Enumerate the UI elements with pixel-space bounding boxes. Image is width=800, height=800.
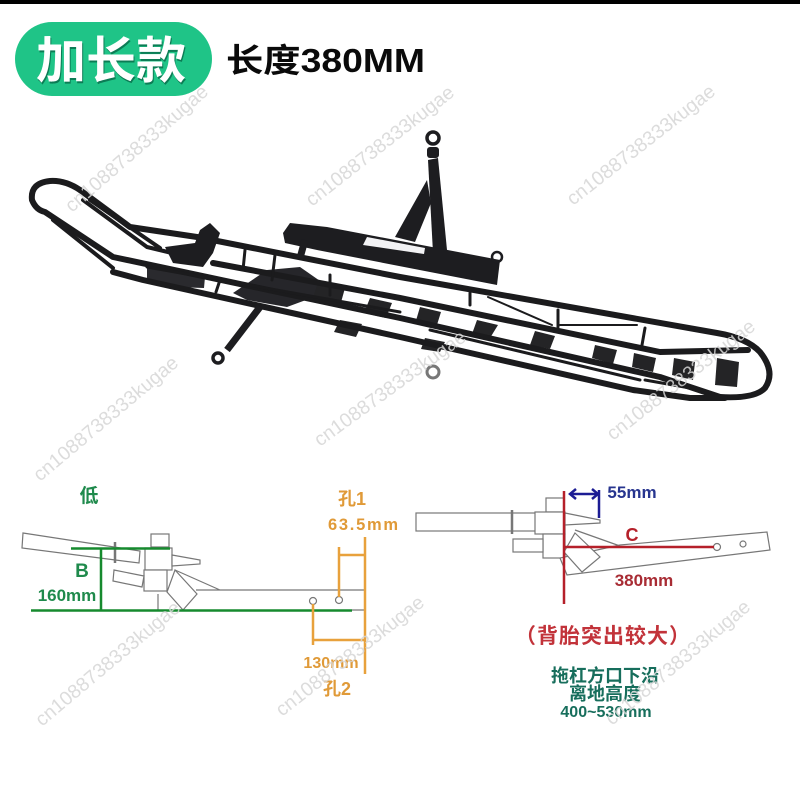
green dimension lines bbox=[31, 548, 352, 610]
red dimension lines bbox=[564, 491, 714, 604]
diagram: low mounting side view bbox=[22, 485, 398, 699]
watermarks: cn1088738333kugae bbox=[272, 591, 429, 721]
watermarks: cn1088738333kugae bbox=[563, 80, 720, 210]
watermarks bbox=[29, 80, 760, 731]
watermarks: cn1088738333kugae bbox=[31, 597, 185, 731]
watermarks: cn1088738333kugae bbox=[601, 596, 755, 730]
note: hitch height: 拖杠方口下沿 bbox=[551, 665, 659, 686]
label: 63.5mm: 63.5mm bbox=[328, 516, 398, 534]
label: 130mm: 130mm bbox=[303, 655, 359, 672]
caption: larger spare tyre protrusion: （背胎突出较大） bbox=[515, 624, 691, 648]
watermarks: cn1088738333kugae bbox=[29, 352, 183, 486]
watermarks: cn1088738333kugae bbox=[603, 315, 760, 445]
label: 160mm: 160mm bbox=[38, 586, 96, 605]
orange dimensions bbox=[313, 537, 365, 674]
blue 55mm arrow bbox=[570, 489, 599, 518]
note: hitch height: 离地高度 bbox=[569, 683, 641, 704]
hitch outline bbox=[22, 533, 364, 610]
loose ring bbox=[427, 366, 439, 378]
rear mechanism bbox=[233, 267, 333, 307]
note: hitch height: 400~530mm bbox=[560, 704, 652, 721]
label: B: B bbox=[75, 561, 89, 582]
diagram: protrusion side view bbox=[416, 483, 770, 721]
label: 380mm: 380mm bbox=[615, 571, 673, 590]
hitch outline bbox=[416, 498, 770, 575]
note: hitch height bbox=[551, 665, 659, 721]
badge: 加长款: 加长款 bbox=[37, 35, 187, 91]
badge: 加长款: 加长款 bbox=[36, 33, 186, 89]
badge: 加长款 bbox=[15, 22, 212, 96]
heading: length: 长度380MM bbox=[226, 42, 425, 79]
label: hole 1: 孔1 bbox=[338, 489, 366, 509]
rack rails bbox=[32, 181, 769, 398]
cross members bbox=[312, 283, 739, 387]
watermarks: cn1088738333kugae bbox=[310, 326, 470, 451]
product photo: motorcycle carrier rack bbox=[32, 132, 769, 398]
watermarks: cn1088738333kugae bbox=[61, 81, 213, 217]
label: hole 2: 孔2 bbox=[323, 679, 351, 699]
cross bar with mast bbox=[283, 132, 502, 285]
watermarks: cn1088738333kugae bbox=[302, 81, 459, 211]
rear plate bbox=[147, 265, 205, 288]
wheel chock bbox=[165, 223, 220, 267]
label: low: 低 bbox=[79, 485, 99, 507]
label: 55mm: 55mm bbox=[607, 483, 657, 502]
hitch arm bbox=[213, 307, 260, 363]
label: C: C bbox=[626, 525, 638, 545]
